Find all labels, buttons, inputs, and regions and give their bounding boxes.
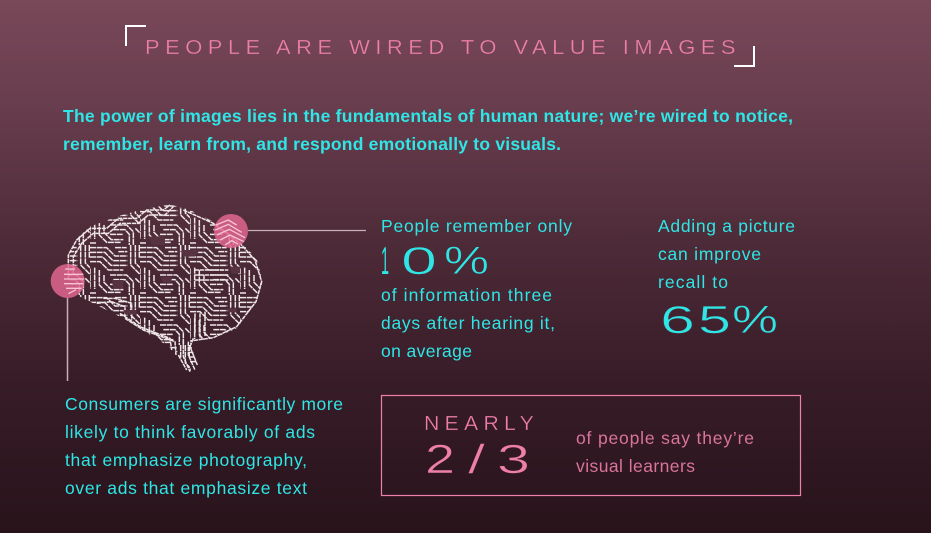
icon: circuit brain — [68, 204, 263, 372]
intro text — [63, 106, 793, 154]
consumers text: over ads that emphasize text — [65, 478, 307, 498]
consumers text: likely to think favorably of ads — [65, 422, 315, 442]
two thirds number: / — [468, 436, 486, 482]
circle highlight left — [51, 264, 85, 298]
stat: 10% — [381, 216, 572, 361]
callout: nearly 2/3 — [382, 396, 800, 496]
title — [126, 26, 754, 66]
circle highlight upper right — [214, 214, 248, 248]
10% number: % — [444, 240, 489, 283]
title corner bracket top-left — [126, 26, 146, 46]
connector line to consumers text — [66, 298, 68, 381]
callout border — [382, 396, 800, 496]
65% number: % — [732, 299, 778, 342]
title corner bracket bottom-right — [734, 46, 754, 66]
dark gaps between traces — [112, 237, 240, 314]
two thirds number: 2 — [425, 436, 455, 482]
65% number: 5 — [698, 299, 731, 342]
10% number: 0 — [401, 240, 437, 283]
stat: 10%: days after hearing it, — [381, 313, 555, 333]
stat: 65%: recall to — [658, 272, 728, 292]
title text: PEOPLE ARE WIRED TO VALUE IMAGES — [145, 37, 741, 59]
callout text: of people say they’re — [576, 428, 754, 448]
stat: 65% — [658, 216, 795, 342]
stat: 65%: can improve — [658, 244, 761, 264]
stat: 10%: People remember only — [381, 216, 572, 236]
consumers text — [65, 394, 343, 498]
consumers text: Consumers are significantly more — [65, 394, 343, 414]
brain circuit illustration — [51, 204, 366, 381]
stat: 10%: on average — [381, 341, 472, 361]
connector line to 10% stat — [248, 230, 366, 232]
10% number: 1 — [381, 240, 389, 283]
traces visible through circles — [64, 220, 245, 294]
callout: nearly 2/3: visual learners — [576, 456, 695, 476]
two thirds number: 3 — [497, 436, 530, 482]
stat: 65%: Adding a picture — [658, 216, 795, 236]
consumers text: that emphasize photography, — [65, 450, 307, 470]
intro text: remember, learn from, and respond emotionally to visuals. — [63, 134, 561, 154]
stat: 10%: of information three — [381, 285, 552, 305]
intro text: The power of images lies in the fundamentals of human nature; we’re wired to notice, — [63, 106, 793, 126]
65% number: 6 — [660, 299, 695, 342]
nearly label: NEARLY — [424, 413, 539, 435]
